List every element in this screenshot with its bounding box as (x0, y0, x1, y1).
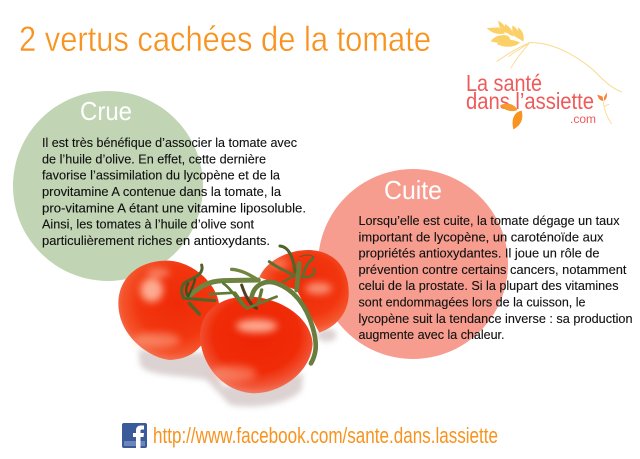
crue text block: particulièrement riches en antioxydants. (42, 233, 270, 248)
cuite text block: augmente avec la chaleur. (358, 327, 504, 342)
crue text block: Il est très bénéfique d’associer la tomate avec (42, 135, 297, 150)
crue text block: favorise l’assimilation du lycopène et de la (42, 168, 281, 183)
cuite text block: sont endommagées lors de la cuisson, le (358, 294, 586, 310)
title: 2 vertus cachées de la tomate (19, 20, 431, 59)
cuite text block: important de lycopène, un caroténoïde aux (358, 229, 604, 244)
crue text block: pro-vitamine A étant une vitamine liposoluble. (42, 200, 306, 215)
illustration: tomatoes on the vine (118, 246, 349, 393)
tomato: left (118, 261, 223, 360)
panel: crue circle (13, 91, 203, 281)
logo wordmark line 1: La santé (466, 70, 542, 96)
crue text block: provitamine A contenue dans la tomate, la (42, 184, 282, 199)
logo wordmark suffix: .com (570, 112, 596, 126)
calyx leaves (182, 246, 314, 314)
tomato: right (259, 250, 349, 333)
cuite text block (358, 213, 632, 342)
logo wordmark line 2: dans l’assiette (466, 88, 594, 114)
vine stems (187, 263, 316, 363)
crue heading: Crue (80, 96, 132, 126)
tomato highlights (133, 260, 332, 381)
icon: wheat ear (487, 21, 622, 92)
panel: cuite circle (318, 169, 508, 359)
cuite text block: propriétés antioxydantes. Il joue un rôle de (358, 246, 600, 261)
crue text block: Ainsi, les tomates à l’huile d’olive sont (42, 217, 254, 232)
crue text block: de l’huile d’olive. En effet, cette dernière (42, 151, 266, 166)
tomato shadow (138, 328, 337, 407)
cuite text block: Lorsqu’elle est cuite, la tomate dégage un taux (358, 213, 620, 228)
tomato: center (200, 297, 313, 393)
cuite heading: Cuite (384, 175, 442, 205)
icon: facebook (122, 423, 147, 448)
icon: butterfly and sprig (597, 93, 612, 124)
cuite text block: prévention contre certains cancers, notamment (358, 262, 627, 277)
footer link: http://www.facebook.com/sante.dans.lassiette (153, 423, 498, 448)
cuite text block: celui de la prostate. Si la plupart des vitamines (358, 278, 619, 293)
icon: orange leaves (500, 104, 522, 129)
logo: la santé dans l'assiette (466, 21, 622, 129)
cuite text block: lycopène suit la tendance inverse : sa production (358, 311, 632, 326)
crue text block (42, 135, 306, 248)
